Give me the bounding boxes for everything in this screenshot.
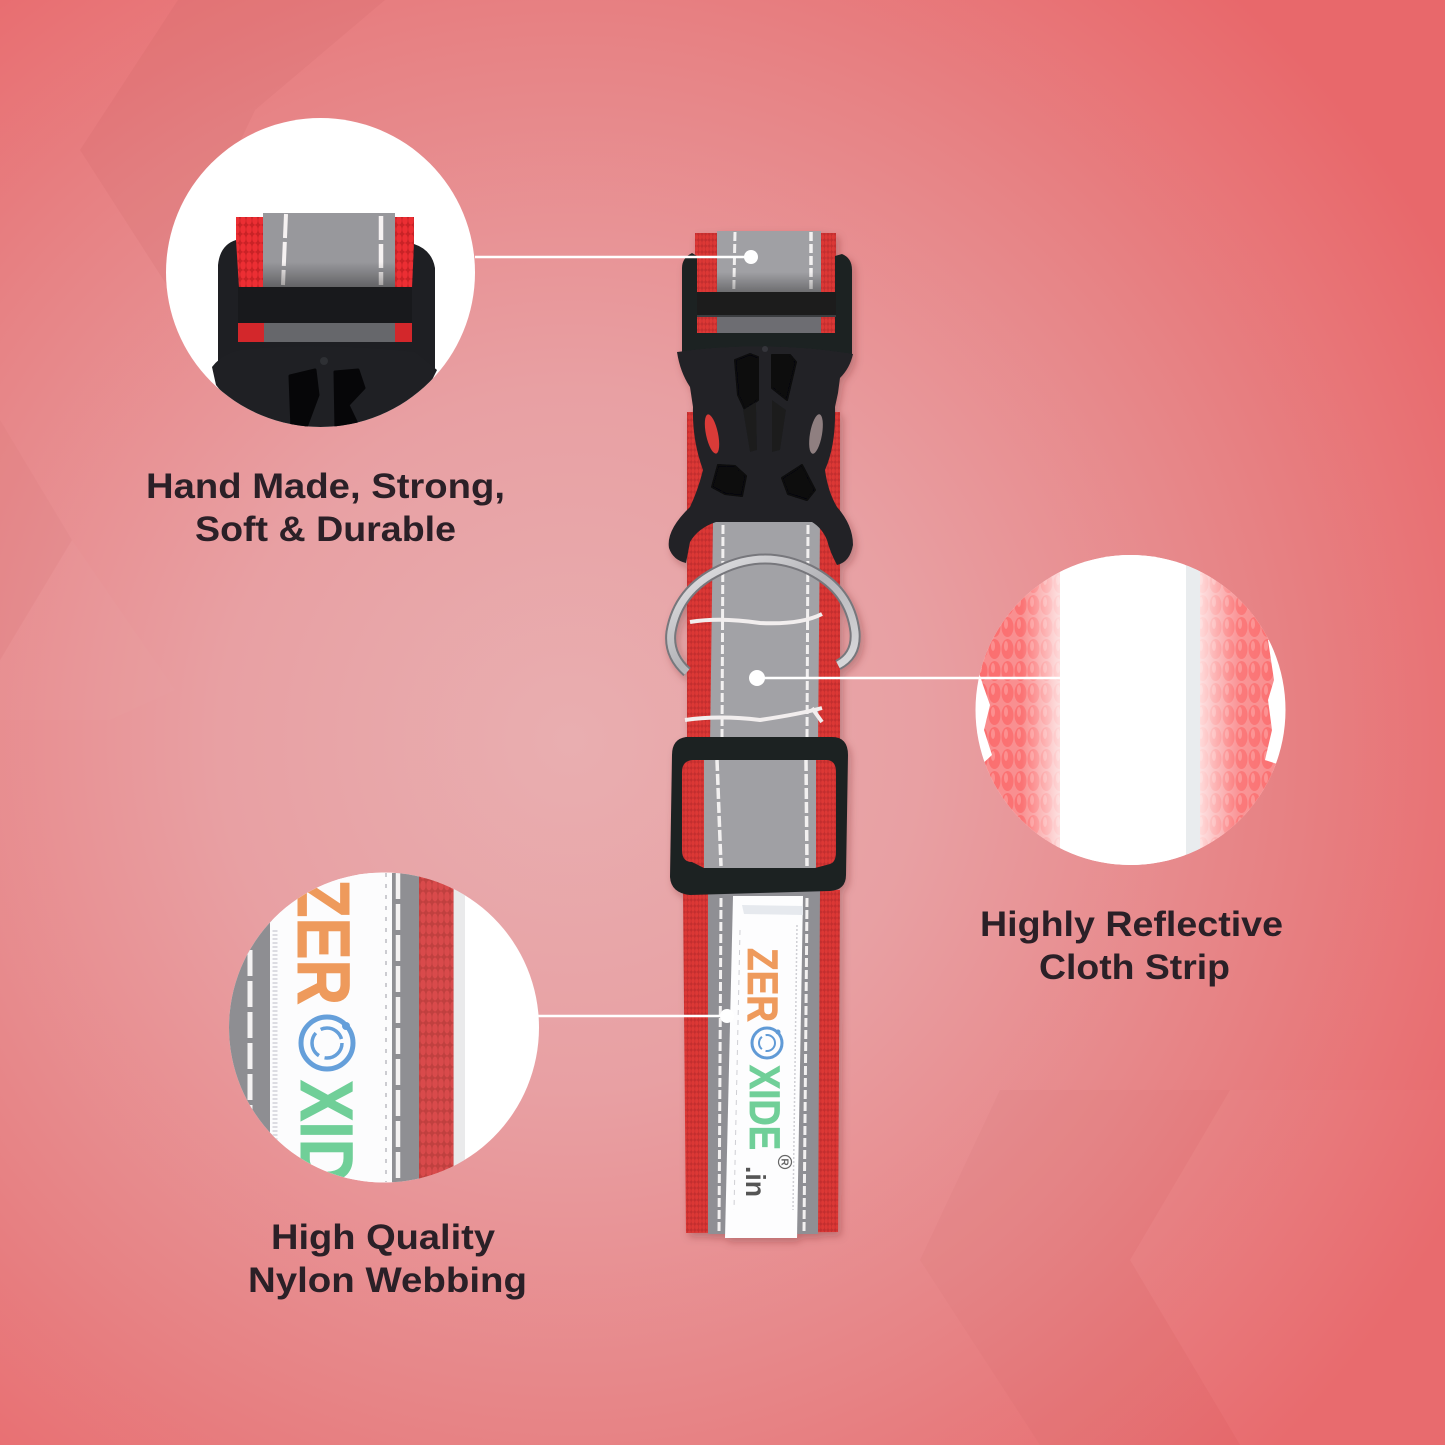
cross stitches (690, 614, 822, 623)
label: hand made (146, 467, 505, 549)
slider strap section (682, 758, 836, 868)
collar product (669, 231, 855, 1238)
label: nylon webbing: High Quality (271, 1218, 496, 1257)
callout circle: reflective strip close-up (965, 555, 1295, 865)
side-release buckle body (669, 346, 853, 565)
label: hand made: Soft & Durable (195, 510, 456, 549)
callout circle: webbing close-up (229, 872, 539, 1182)
callout circle: buckle close-up (166, 118, 475, 430)
connector line: webbing (538, 1015, 727, 1017)
label: reflective strip: Highly Reflective (980, 905, 1283, 944)
anchor dot: webbing (720, 1009, 734, 1023)
anchor dot: reflective strip (749, 670, 765, 686)
connector line: reflective strip (757, 677, 1062, 679)
label: nylon webbing (248, 1218, 527, 1300)
top buckle frame (682, 253, 852, 356)
top strap end (695, 231, 836, 334)
callout circle: webbing close-up: XIDE (285, 1080, 368, 1225)
label: reflective strip: Cloth Strip (1039, 948, 1230, 987)
anchor dot: buckle (744, 250, 758, 264)
middle strap (685, 412, 840, 747)
label: hand made: Hand Made, Strong, (146, 467, 505, 506)
label: reflective strip (980, 905, 1283, 987)
enlarged label text: ZER (282, 879, 365, 1005)
label: nylon webbing: Nylon Webbing (248, 1261, 527, 1300)
lower strap with label: XIDE (740, 1065, 788, 1150)
slider buckle (670, 737, 848, 895)
connector line: buckle (475, 256, 750, 258)
brand label text: ZER (738, 948, 786, 1022)
lower strap with label: .in (740, 1166, 771, 1197)
D-ring (671, 559, 855, 672)
lower strap with label (683, 890, 840, 1238)
lower strap with label: R (778, 1158, 790, 1166)
